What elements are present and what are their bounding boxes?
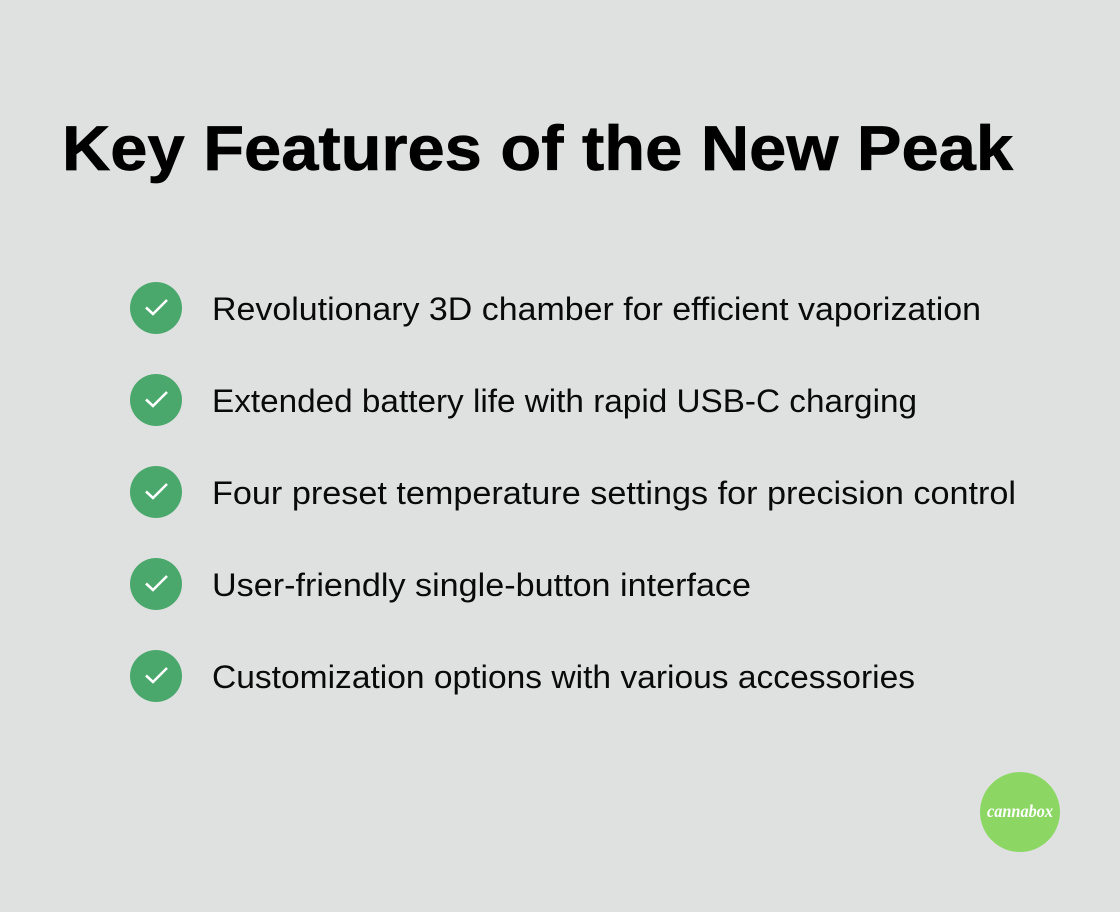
feature 1: Revolutionary 3D chamber for efficient vaporization: [212, 291, 981, 327]
feature 4: User-friendly single-button interface: [212, 567, 751, 603]
title: Key Features of the New Peak: [62, 114, 1014, 184]
feature 5: Customization options with various accessories: [212, 659, 915, 695]
feature 2: [130, 374, 917, 426]
feature 3: [130, 466, 1016, 518]
feature 5: [130, 650, 915, 702]
feature 4: [130, 558, 751, 610]
feature 2: Extended battery life with rapid USB-C charging: [212, 383, 917, 419]
feature 1: [130, 282, 981, 334]
feature 3: Four preset temperature settings for precision control: [212, 475, 1016, 511]
feature list: [130, 282, 1016, 702]
logo: cannabox badge: [980, 772, 1060, 852]
logo: cannabox badge: cannabox: [987, 801, 1053, 821]
